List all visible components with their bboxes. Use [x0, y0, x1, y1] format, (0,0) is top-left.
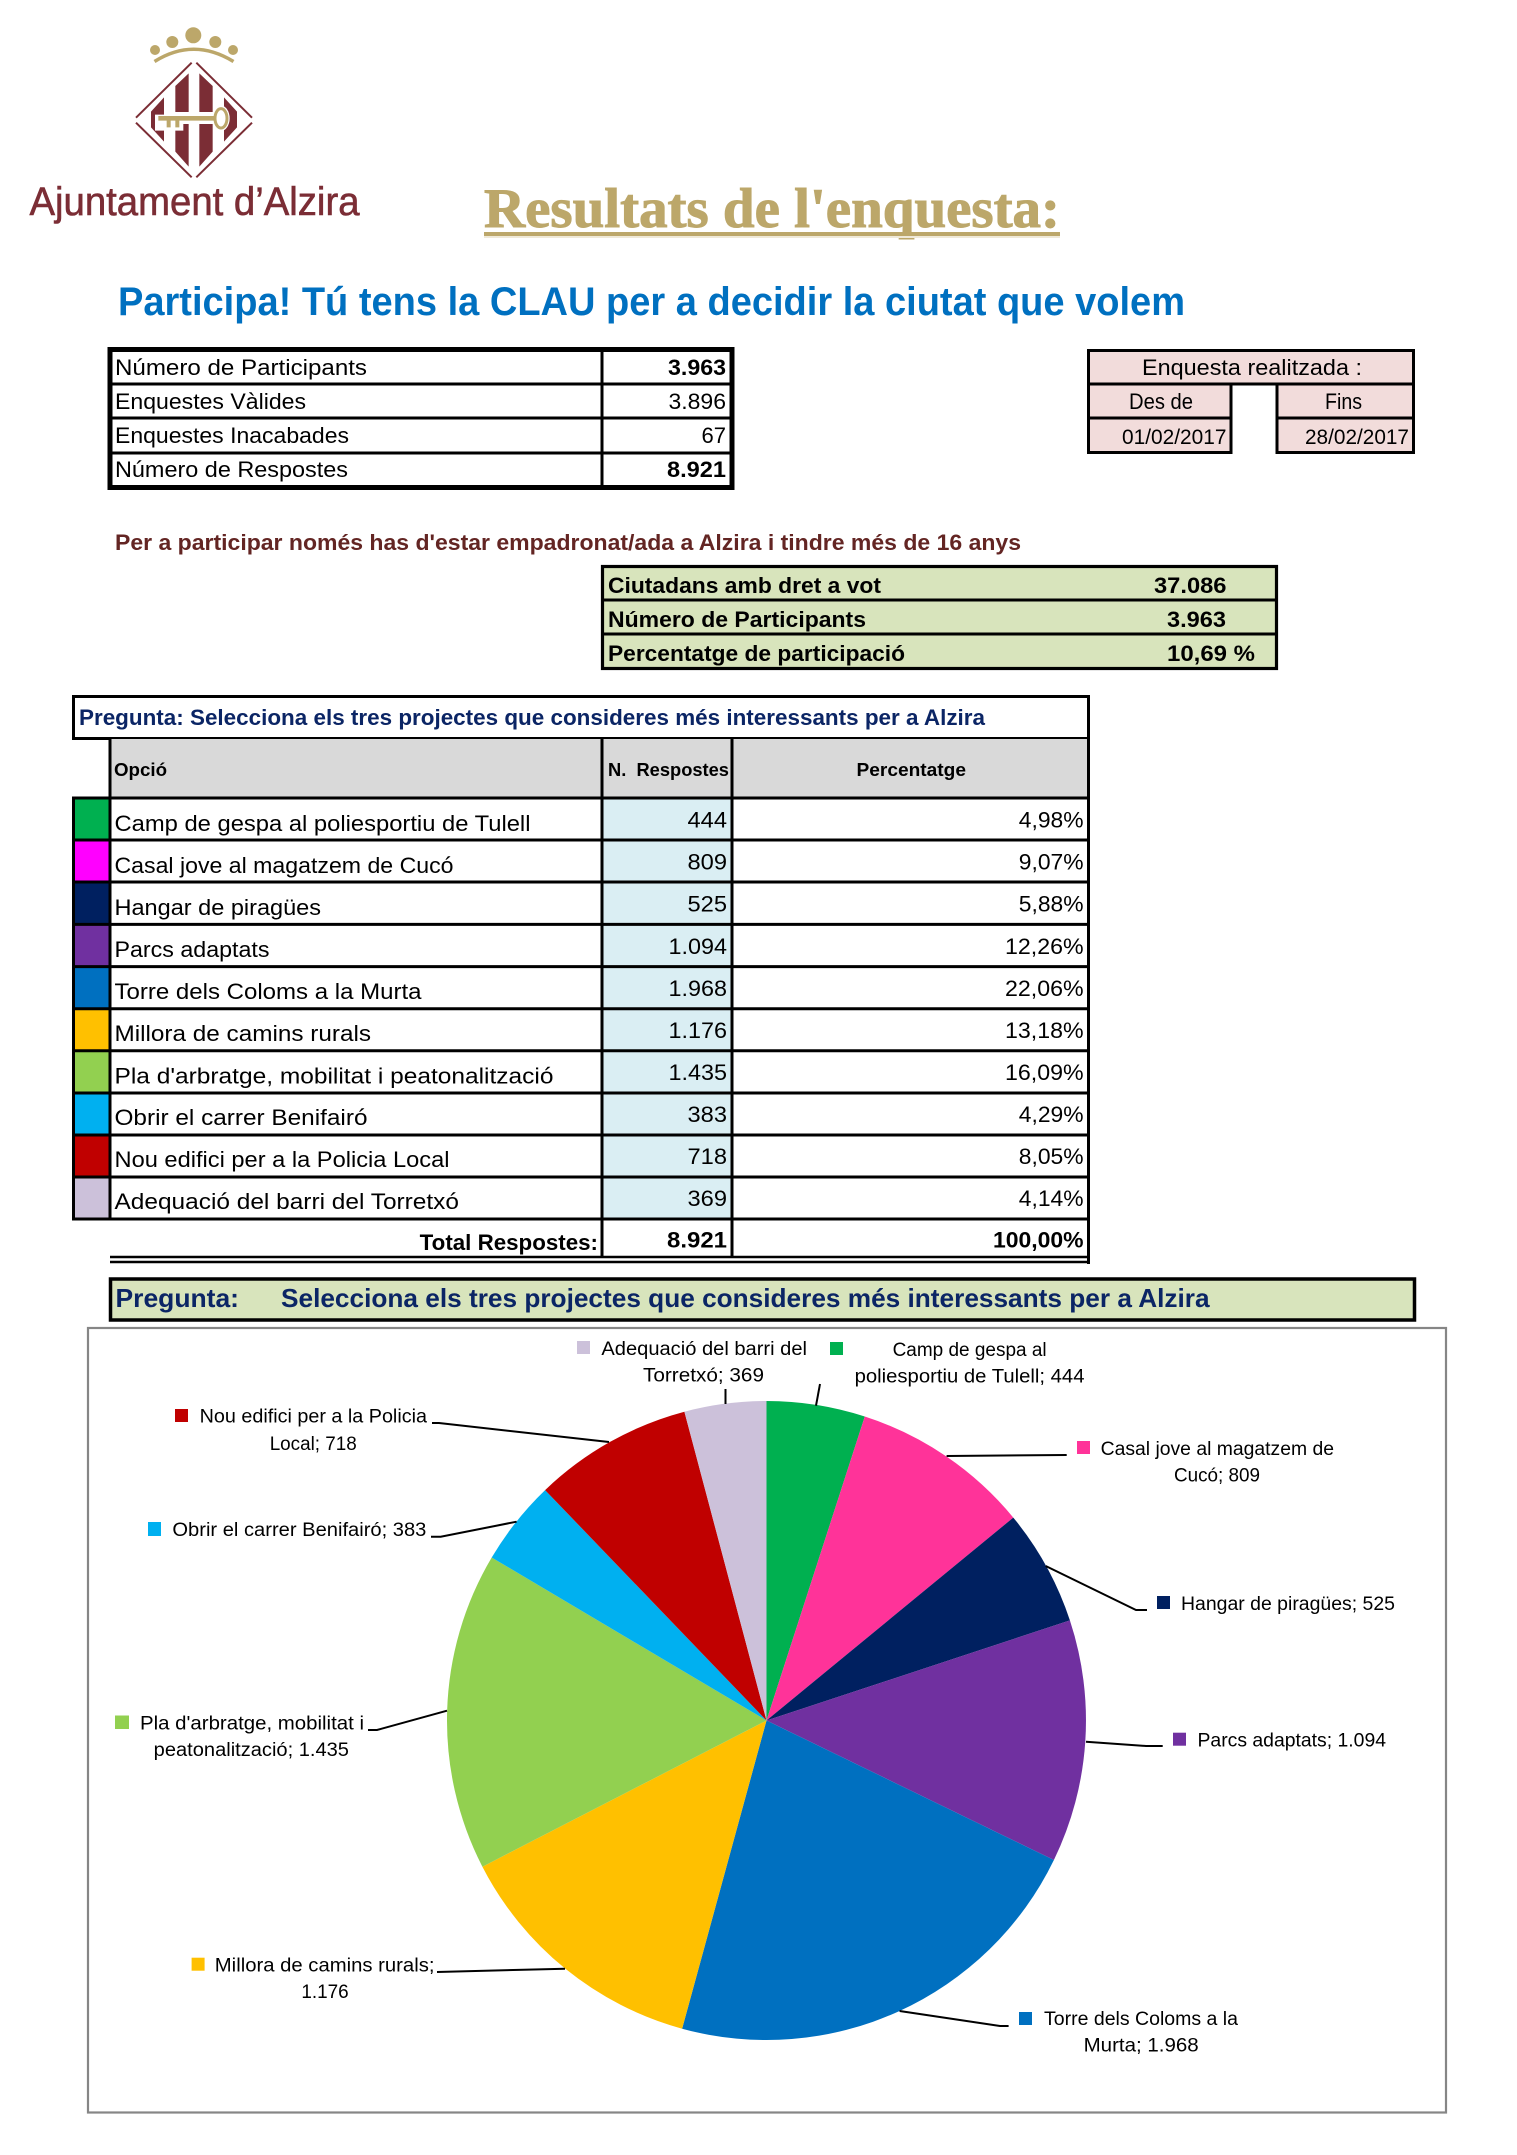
table row: Torre — [114, 976, 1084, 1004]
logo: Ajuntament d'Alzira — [30, 27, 360, 224]
panel: participation counts table: Número de Participants — [115, 355, 367, 380]
panel: participation rate table: 10,69 % — [1167, 641, 1255, 666]
pie label: Nou edifici: Local; 718 — [270, 1434, 357, 1455]
table row: Obrir — [114, 1102, 1084, 1130]
table row: Camp de gespa: 444 — [688, 808, 727, 832]
table row: Millora — [114, 1018, 1084, 1046]
panel: participation counts table: Enquestes Vàlides — [115, 389, 306, 414]
table row: Adequació: 4,14% — [1019, 1186, 1084, 1211]
pie label: Camp de gespa: Camp de gespa al — [893, 1340, 1047, 1361]
panel: participation rate table: Percentatge de participació — [608, 641, 905, 666]
panel: pie chart frame — [88, 1328, 1446, 2112]
eligibility note: Per a participar només has d'estar empadronat/ada a Alzira i tindre més de 16 anys — [115, 530, 1021, 555]
table row: Pla: 16,09% — [1005, 1060, 1084, 1085]
table colour swatches — [72, 798, 110, 1219]
table row: Hangar: Hangar de piragües — [114, 895, 321, 920]
table row: Camp de gespa: 4,98% — [1019, 808, 1084, 832]
table row: Nou edifici: Nou edifici per a la Policia Local — [114, 1147, 450, 1172]
pie leader lines — [368, 1384, 1163, 2026]
pie chart — [447, 1401, 1086, 2040]
table row: Nou edifici: 718 — [688, 1144, 727, 1169]
table row: Parcs: 1.094 — [668, 934, 727, 959]
pie label: Camp de gespa: poliesportiu de Tulell; 444 — [855, 1367, 1085, 1388]
table row: Parcs: Parcs adaptats — [114, 937, 270, 962]
table row: Parcs: 12,26% — [1005, 934, 1084, 959]
table row: Obrir: 383 — [688, 1102, 727, 1127]
panel: participation rate table: 3.963 — [1167, 607, 1226, 632]
table row: Adequació: 369 — [688, 1186, 727, 1211]
table row: Torre: 22,06% — [1005, 976, 1084, 1001]
pie label: Nou edifici — [175, 1407, 427, 1455]
table row: Millora: 1.176 — [668, 1018, 727, 1043]
pie label: Casal jove — [1077, 1439, 1334, 1487]
panel: survey dates: Fins — [1325, 389, 1362, 414]
table row: Pla: Pla d'arbratge, mobilitat i peatonalització — [114, 1063, 554, 1088]
panel: participation rate table — [602, 566, 1277, 668]
panel: participation counts table: Número de Respostes — [115, 457, 348, 482]
title: Resultats de l'enquesta: — [484, 178, 1060, 240]
pie label: Adequació: Torretxó; 369 — [643, 1366, 764, 1387]
pie label: Nou edifici: Nou edifici per a la Policia — [200, 1407, 427, 1428]
table row: Casal jove: 9,07% — [1019, 850, 1084, 874]
table row: Adequació: Adequació del barri del Torretxó — [114, 1189, 459, 1214]
pie label: Casal jove: Casal jove al magatzem de — [1101, 1439, 1334, 1460]
panel: participation rate table: 37.086 — [1154, 573, 1226, 598]
table row: Torre: 1.968 — [668, 976, 727, 1001]
pie label: Pla: Pla d'arbratge, mobilitat i — [140, 1713, 364, 1734]
table column headers: N. Respostes — [608, 759, 729, 780]
panel: survey dates — [1088, 350, 1414, 452]
table row: Hangar: 5,88% — [1019, 892, 1084, 916]
panel: participation rate table: Ciutadans amb dret a vot — [608, 573, 882, 598]
panel: survey dates: Enquesta realitzada : — [1142, 355, 1362, 380]
responses column shading — [603, 798, 732, 1219]
table row: Obrir: Obrir el carrer Benifairó — [114, 1105, 368, 1130]
table column headers — [110, 739, 1090, 798]
table total row: 100,00% — [993, 1228, 1084, 1253]
table row: Torre: Torre dels Coloms a la Murta — [114, 979, 422, 1004]
table row: Pla: 1.435 — [668, 1060, 727, 1085]
panel: participation counts table: Enquestes Inacabades — [115, 423, 349, 448]
table total row — [420, 1228, 1084, 1255]
panel: responses table — [72, 696, 1090, 1264]
table row: Camp de gespa — [114, 808, 1084, 836]
pie label: Torre: Torre dels Coloms a la — [1044, 2009, 1238, 2030]
panel: participation counts table: 8.921 — [667, 457, 726, 482]
table row: Millora: Millora de camins rurals — [114, 1021, 371, 1046]
pie label: Adequació: Adequació del barri del — [601, 1339, 807, 1360]
panel: survey dates: Des de — [1129, 389, 1193, 414]
table row: Parcs — [114, 934, 1084, 962]
table column headers: Percentatge — [856, 759, 966, 780]
panel: survey dates: 01/02/2017 — [1122, 426, 1226, 449]
pie label: Parcs: Parcs adaptats; 1.094 — [1198, 1731, 1386, 1752]
pie label: Adequació — [577, 1339, 807, 1387]
panel: participation counts table: 3.896 — [668, 389, 726, 414]
chart heading bar — [110, 1279, 1414, 1320]
panel: survey dates: 28/02/2017 — [1305, 426, 1409, 449]
table question heading — [74, 696, 1088, 738]
icon: crown — [150, 27, 238, 62]
table row: Casal jove: Casal jove al magatzem de Cucó — [114, 853, 454, 878]
table total row: Total Respostes: — [420, 1230, 598, 1255]
table row: Adequació — [114, 1186, 1084, 1214]
pie label: Hangar: Hangar de piragües; 525 — [1181, 1594, 1395, 1615]
table column headers: Opció — [114, 759, 167, 780]
table row: Nou edifici: 8,05% — [1019, 1144, 1084, 1169]
pie label: Millora: 1.176 — [301, 1982, 349, 2003]
pie label: Torre: Murta; 1.968 — [1084, 2036, 1199, 2057]
table row: Obrir: 4,29% — [1019, 1102, 1084, 1127]
subtitle: Participa! Tú tens la CLAU per a decidir la ciutat que volem — [118, 280, 1185, 324]
chart heading bar: Pregunta: — [116, 1283, 239, 1313]
pie label: Millora — [192, 1956, 434, 2003]
pie label: Torre — [1019, 2009, 1238, 2057]
table row: Hangar — [114, 892, 1084, 920]
panel: participation counts table — [110, 350, 733, 488]
table row: Nou edifici — [114, 1144, 1084, 1172]
table row: Casal jove: 809 — [688, 850, 727, 874]
table row: Millora: 13,18% — [1005, 1018, 1084, 1043]
pie label: Obrir: Obrir el carrer Benifairó; 383 — [172, 1520, 426, 1541]
pie label: Pla: peatonalització; 1.435 — [154, 1740, 349, 1761]
table question heading: Pregunta: Selecciona els tres projectes que consideres més interessants per a Alzira — [79, 705, 986, 730]
pie label: Camp de gespa — [830, 1340, 1085, 1388]
panel: participation counts table: 3.963 — [668, 355, 726, 380]
pie label: Millora: Millora de camins rurals; — [215, 1956, 434, 1977]
chart heading bar: Selecciona els tres projectes que consideres més interessants per a Alzira — [281, 1283, 1210, 1313]
pie label: Pla — [115, 1713, 364, 1761]
table row: Casal jove — [114, 850, 1084, 878]
panel: participation rate table: Número de Participants — [608, 607, 866, 632]
icon: diamond shield with key — [136, 63, 252, 177]
logo wordmark: Ajuntament d’Alzira — [30, 180, 360, 224]
table row: Hangar: 525 — [688, 892, 727, 916]
table row: Pla — [114, 1060, 1084, 1088]
table row: Camp de gespa: Camp de gespa al poliesportiu de Tulell — [114, 811, 530, 836]
table total row: 8.921 — [667, 1228, 727, 1253]
pie label: Casal jove: Cucó; 809 — [1174, 1466, 1260, 1487]
panel: participation counts table: 67 — [702, 423, 726, 448]
